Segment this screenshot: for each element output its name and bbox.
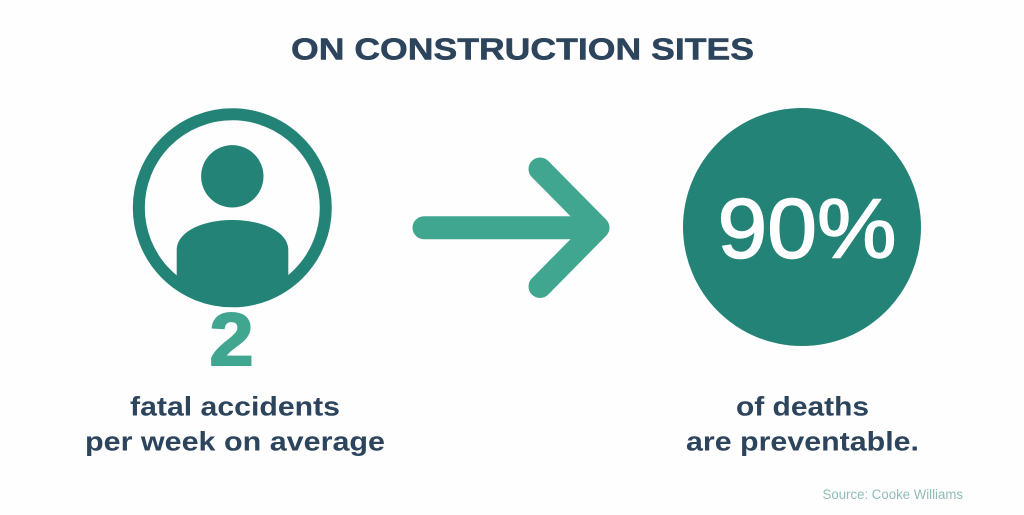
arrow bbox=[424, 169, 598, 286]
text: of deaths are preventable bbox=[686, 392, 919, 456]
text: fatal accidents per week on average: per week on average bbox=[85, 426, 385, 456]
circle: 90% statistic: 90% bbox=[718, 182, 896, 276]
infographic bbox=[87, 38, 962, 499]
circle: 90% statistic bbox=[683, 108, 921, 346]
text: of deaths are preventable: of deaths bbox=[736, 392, 869, 422]
text: fatal accidents per week on average: fatal accidents bbox=[130, 392, 340, 422]
source: Source: Cooke Williams bbox=[822, 487, 963, 502]
text: fatal accidents per week on average bbox=[85, 392, 385, 456]
text: of deaths are preventable: are preventable. bbox=[686, 426, 919, 456]
number: 2 fatal accidents: 2 bbox=[210, 298, 254, 381]
title: ON CONSTRUCTION SITES bbox=[291, 32, 754, 66]
icon: person in ring bbox=[139, 114, 326, 320]
